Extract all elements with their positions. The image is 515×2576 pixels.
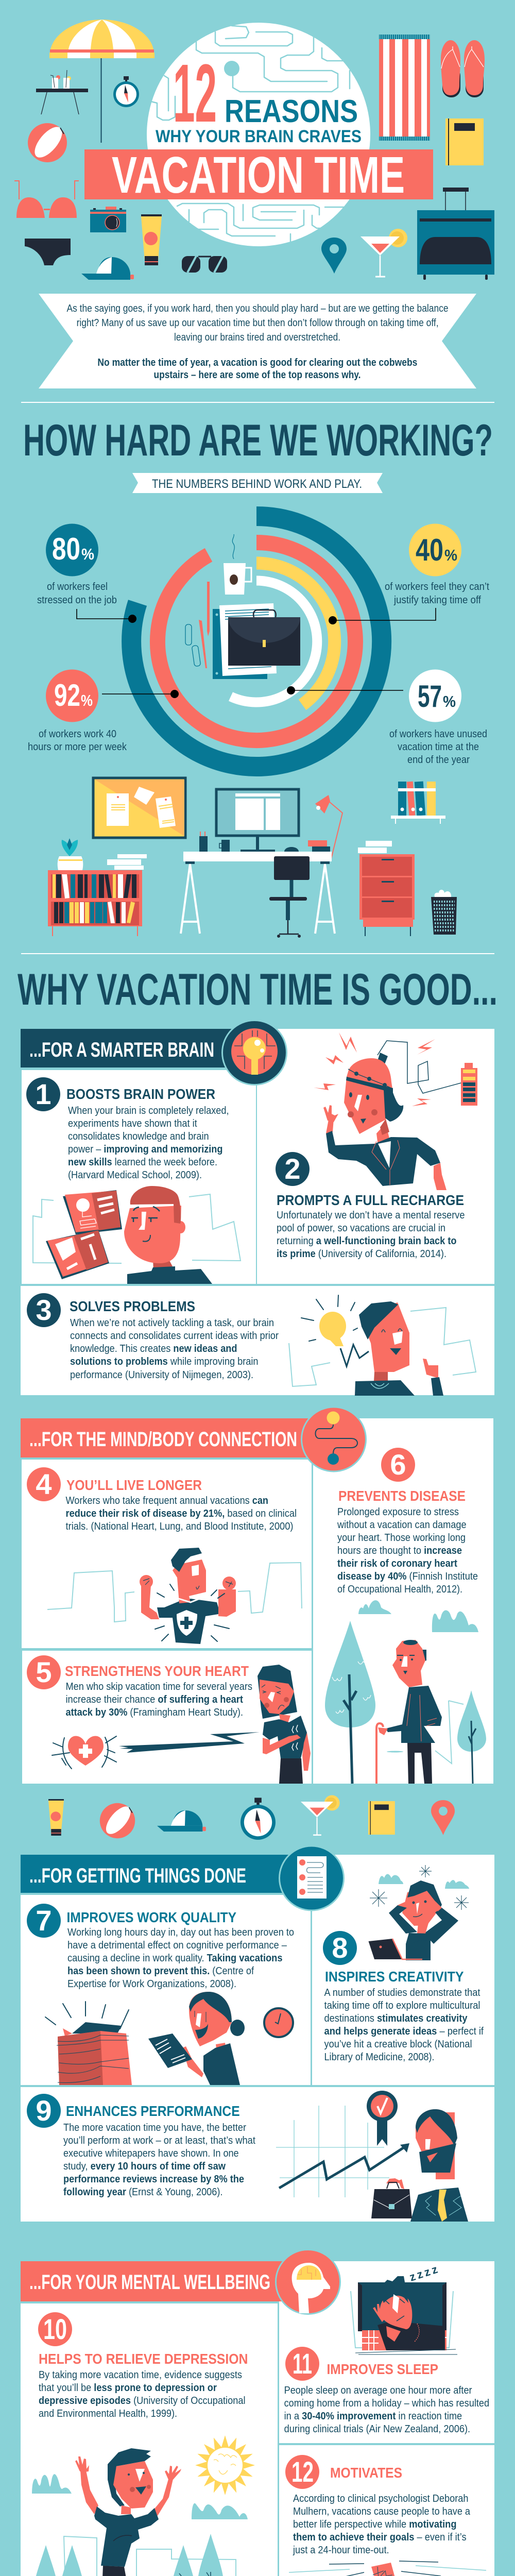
number badge 4: 4 — [36, 1468, 52, 1500]
stat: 57 percent: vacation time at the — [398, 741, 479, 753]
body text reason 12 — [293, 2493, 471, 2556]
number badge 6: 6 — [390, 1448, 406, 1481]
reason 8 — [323, 1865, 484, 2063]
number badge 3 — [27, 1293, 61, 1327]
icon: sunscreen tube — [48, 1799, 64, 1836]
body text reason 12: them to achieve their goals – even if it’s — [293, 2532, 467, 2543]
stacked papers on bookcase — [107, 854, 147, 870]
ring: 57 percent unused vacation — [231, 581, 317, 702]
subheading ribbon: numbers behind work and play: THE NUMBERS BEHIND WORK AND PLAY. — [152, 477, 362, 491]
body text reason 9: following year (Ernst & Young, 2006). — [63, 2187, 222, 2198]
body text reason 6: their risk of coronary heart — [337, 1558, 457, 1569]
number badge 6 — [381, 1448, 415, 1482]
body text reason 9: study, every 10 hours of time off saw — [63, 2161, 226, 2172]
waste basket — [431, 890, 457, 935]
icon: heart with cross — [52, 1736, 116, 1769]
badge: mind to heart connection — [301, 1406, 367, 1472]
title line why your brain craves: WHY YOUR BRAIN CRAVES — [156, 127, 362, 146]
intro text: No matter the time of year, a vacation is good for clearing out the cobwebs — [97, 357, 417, 368]
body text reason 1: new skills learned the week before. — [68, 1157, 217, 1168]
badge: brain and light bulb — [221, 1020, 287, 1086]
stat: 40 percent: of workers feel they can’t — [385, 581, 489, 592]
icon: beach towel — [379, 35, 430, 141]
section header: mental wellbeing: ...FOR YOUR MENTAL WELLBEING — [29, 2271, 270, 2294]
body text reason 4: trials. (National Heart, Lung, and Blood Institute, 2000) — [66, 1521, 294, 1532]
number badge 5: 5 — [36, 1656, 52, 1688]
icon: notebook — [213, 603, 277, 679]
body text reason 2: Unfortunately we don’t have a mental reserve — [277, 1210, 465, 1221]
body text reason 8: destinations stimulates creativity — [324, 2013, 468, 2024]
body text reason 12: better life perspective while motivating — [293, 2519, 456, 2530]
illustration: woman with chest pain — [258, 1665, 311, 1784]
ring: 80 percent stressed — [131, 516, 382, 767]
icon: award ribbon — [367, 2091, 398, 2146]
icon: lightning bolt — [119, 1732, 260, 1753]
body text reason 5: attack by 30% (Framingham Heart Study). — [66, 1707, 243, 1718]
section header: smarter brain: ...FOR A SMARTER BRAIN — [29, 1039, 214, 1061]
body text reason 8 — [324, 1987, 484, 2063]
desk — [181, 832, 335, 934]
intro ribbon — [39, 294, 476, 388]
stat: 40 percent: justify taking time off — [393, 595, 481, 606]
illustration: office scene — [48, 778, 457, 938]
body text reason 9: executive whitepapers have shown. In one — [63, 2148, 239, 2159]
section header: smarter brain — [21, 1029, 237, 1067]
reason 5 — [27, 1655, 311, 1784]
body text reason 7: Working long hours day in, day out has been proven to — [67, 1927, 294, 1938]
heading: enhances performance: ENHANCES PERFORMANCE — [66, 2103, 240, 2119]
illustration: woman with battery — [314, 1032, 477, 1190]
body text reason 7: causing a decline in work quality. Taking vacations — [67, 1953, 282, 1964]
body text reason 4: reduce their risk of disease by 21%, based on clinical — [66, 1508, 297, 1519]
icon: map pin — [321, 238, 347, 274]
ring: 40 percent can't justify — [256, 563, 335, 705]
heading: boosts brain power: BOOSTS BRAIN POWER — [66, 1086, 215, 1102]
number badge 8: 8 — [332, 1931, 348, 1964]
illustration: happy person with sun and trees — [31, 2435, 255, 2576]
icon: camera — [90, 207, 126, 232]
body text reason 8: taking time off to explore multicultural — [324, 2000, 480, 2011]
body text reason 4: Workers who take frequent annual vacations can — [66, 1495, 268, 1506]
section header: mind body connection: ...FOR THE MIND/BODY CONNECTION — [29, 1428, 297, 1451]
body text reason 5: Men who skip vacation time for several years — [66, 1681, 252, 1692]
number badge 11 — [285, 2347, 319, 2381]
icon: brain circle with maze — [147, 23, 370, 246]
bookcase — [48, 870, 142, 936]
subheading ribbon: numbers behind work and play — [132, 473, 383, 493]
reason 4 — [27, 1467, 302, 1644]
panel: for your mental wellbeing — [21, 2249, 494, 2576]
intro text — [67, 303, 448, 381]
illustration: strong healthy man — [47, 1548, 302, 1644]
panel: for the mind body connection — [21, 1406, 493, 1784]
chart: concentric percentage rings — [131, 516, 382, 767]
number badge 1: 1 — [35, 1078, 52, 1110]
body text reason 9: you’ll perform at work – or at least, that’s what — [63, 2135, 255, 2146]
body text reason 8: you’ve hit a creative block (National — [324, 2039, 472, 2050]
corkboard — [93, 778, 185, 838]
number badge 2: 2 — [284, 1153, 301, 1185]
reason 12 — [285, 2455, 486, 2576]
badge: head with brain — [275, 2249, 341, 2315]
intro text: upstairs – here are some of the top reasons why. — [153, 369, 360, 381]
body text reason 1: power – improving and memorizing — [68, 1144, 222, 1155]
number badge 1 — [26, 1077, 60, 1111]
intro text: As the saying goes, if you work hard, then you should play hard – but are we getting the balance — [67, 303, 448, 314]
body text reason 12: Mulhern, vacations cause people to have a — [293, 2506, 471, 2517]
body text reason 12: just a 24-hour time-out. — [293, 2545, 389, 2556]
body text reason 2 — [277, 1210, 465, 1260]
heading: inspires creativity: INSPIRES CREATIVITY — [325, 1969, 464, 1985]
body text reason 3: performance (University of Nijmegen, 2003). — [70, 1369, 253, 1381]
chart: rising arrow on grid — [276, 2106, 409, 2197]
body text reason 9: The more vacation time you have, the better — [63, 2122, 246, 2133]
illustration: desk items at chart centre — [185, 534, 300, 679]
header: title and vacation items — [14, 20, 494, 280]
body text reason 3: knowledge. This creates new ideas and — [70, 1343, 237, 1354]
icon: passport book — [368, 1801, 395, 1835]
icon: martini — [360, 229, 407, 277]
heading: prompts a full recharge: PROMPTS A FULL RECHARGE — [277, 1192, 464, 1208]
body text reason 3 — [70, 1317, 279, 1381]
body text reason 1: experiments have shown that it — [68, 1118, 197, 1129]
stat: 57 percent: % — [443, 692, 456, 710]
body text reason 4 — [66, 1495, 297, 1532]
icon: map pin — [431, 1800, 455, 1835]
number badge 8 — [323, 1931, 357, 1965]
body text reason 10: and Environmental Health, 1999). — [39, 2408, 177, 2419]
icon: bikini top — [14, 181, 79, 218]
badge: checklist — [279, 1845, 345, 1911]
illustration: woman thinking at laptop — [369, 1865, 469, 1960]
title word reasons: REASONS — [225, 94, 358, 129]
body text reason 6: without a vacation can damage — [337, 1519, 467, 1531]
illustration: paper stack and woman with clock — [45, 1992, 293, 2085]
body text reason 3: solutions to problems while improving brain — [70, 1356, 259, 1367]
illustration: businessperson with briefcase — [371, 2109, 468, 2222]
stat: 40 percent — [329, 523, 489, 624]
body text reason 8: A number of studies demonstrate that — [324, 1987, 480, 1998]
panel: for getting things done — [21, 1845, 494, 2222]
body text reason 9: performance reviews increase by 8% the — [63, 2174, 244, 2185]
body text reason 3: connects and consolidates current ideas with prior — [70, 1330, 279, 1342]
icon: cap — [81, 257, 134, 280]
icon: pencils and paperclips — [185, 582, 210, 668]
reason 9 — [21, 2087, 494, 2222]
number badge 7: 7 — [36, 1904, 52, 1937]
stat: 57 percent: end of the year — [407, 754, 470, 766]
body text reason 12: According to clinical psychologist Deborah — [293, 2493, 469, 2504]
icon: passport book — [445, 118, 484, 165]
number badge 7 — [27, 1904, 61, 1938]
stat: 80 percent: % — [81, 545, 94, 563]
body text reason 6: your heart. Those working long — [337, 1532, 466, 1544]
icon row: vacation items — [48, 1795, 455, 1840]
icon: cap — [157, 1810, 206, 1832]
stat: 80 percent: stressed on the job — [37, 595, 117, 606]
icon: beach ball — [28, 122, 67, 162]
icon: martini — [301, 1795, 340, 1835]
body text reason 7: has been shown to prevent this. (Centre of — [67, 1965, 254, 1977]
heading: improves sleep: IMPROVES SLEEP — [327, 2361, 438, 2377]
heading: strengthens your heart: STRENGTHENS YOUR HEART — [65, 1663, 249, 1679]
filing cabinet — [358, 841, 415, 936]
body text reason 1: consolidates knowledge and brain — [68, 1131, 209, 1142]
number badge 5 — [27, 1655, 61, 1689]
icon: beach umbrella — [49, 20, 154, 143]
stat: 57 percent: 57 — [418, 679, 442, 714]
body text reason 7: have a detrimental effect on cognitive performance – — [67, 1940, 287, 1951]
body text reason 6: hours are thought to increase — [337, 1545, 462, 1556]
icon: bikini bottom — [25, 239, 71, 265]
header: title and vacation items: 12 — [173, 47, 217, 139]
number badge 11: 11 — [293, 2347, 312, 2380]
stat: 92 percent: 92 — [54, 678, 80, 713]
stat: 80 percent: of workers feel — [47, 581, 108, 592]
section header: getting things done: ...FOR GETTING THINGS DONE — [29, 1865, 246, 1887]
icon: sunscreen tube — [141, 214, 162, 265]
stat: 92 percent: hours or more per week — [28, 741, 127, 753]
body text reason 11: in a 30-40% improvement in reaction time — [284, 2411, 462, 2422]
body text reason 5 — [66, 1681, 252, 1718]
stat: 40 percent: % — [444, 546, 457, 564]
icon: side table with drinks — [36, 70, 88, 114]
heading: helps to relieve depression: HELPS TO RELIEVE DEPRESSION — [39, 2351, 248, 2367]
heading: motivates: MOTIVATES — [330, 2465, 402, 2481]
potted plant — [58, 838, 83, 870]
illustration: sleeping man in window — [351, 2262, 457, 2354]
body text reason 6 — [337, 1506, 478, 1595]
reason 10 — [31, 2312, 255, 2576]
body text reason 1 — [68, 1105, 229, 1181]
body text reason 2: pool of power, so vacations are crucial in — [277, 1223, 445, 1234]
body text reason 11 — [284, 2385, 489, 2435]
body text reason 8: Library of Medicine, 2008). — [324, 2052, 435, 2063]
stat: 92 percent: of workers work 40 — [39, 728, 116, 740]
body text reason 7 — [67, 1927, 294, 1990]
number badge 2 — [276, 1152, 310, 1186]
reason 3 — [21, 1286, 494, 1396]
body text reason 10 — [39, 2369, 245, 2419]
body text reason 10: that you’ll be less prone to depression or — [39, 2382, 217, 2394]
monitor — [216, 789, 299, 852]
stat: 92 percent — [28, 670, 179, 753]
reason 1 — [26, 1077, 241, 1284]
body text reason 5: increase their chance of suffering a heart — [66, 1694, 243, 1705]
body text reason 7: Expertise for Work Organizations, 2008). — [67, 1978, 236, 1990]
icon: sunglasses — [182, 256, 227, 273]
stat: 40 percent: 40 — [416, 533, 443, 567]
stat: 80 percent — [37, 523, 136, 623]
number badge 9: 9 — [36, 2094, 52, 2127]
reason 6 — [325, 1448, 486, 1784]
body text reason 6: Prolonged exposure to stress — [337, 1506, 459, 1518]
body text reason 9 — [63, 2122, 255, 2198]
body text reason 2: its prime (University of California, 2014). — [277, 1248, 447, 1260]
number badge 12: 12 — [291, 2455, 314, 2488]
icon: coffee cup — [224, 534, 251, 595]
body text reason 8: and helps generate ideas – perfect if — [324, 2026, 484, 2037]
body text reason 11: coming home from a holiday – which has resulted — [284, 2398, 489, 2409]
office chair — [269, 856, 310, 938]
stat: 92 percent: % — [81, 691, 93, 709]
body text reason 2: returning a well-functioning brain back to — [277, 1235, 456, 1247]
body text reason 6: of Occupational Health, 2012). — [337, 1584, 462, 1595]
body text reason 10: depressive episodes (University of Occupational — [39, 2395, 245, 2406]
stat: 57 percent — [287, 670, 487, 766]
reason 11 — [284, 2262, 489, 2435]
number badge 3: 3 — [36, 1294, 52, 1326]
stat: 57 percent: of workers have unused — [389, 728, 487, 740]
icon: stopwatch — [113, 76, 139, 107]
title banner vacation time: VACATION TIME — [112, 146, 405, 204]
heading: you'll live longer: YOU’LL LIVE LONGER — [66, 1477, 202, 1493]
icon: suitcase — [417, 188, 494, 280]
illustration: raised fist with rays — [289, 2561, 486, 2576]
illustration: sleeping man in window: zzzz — [408, 2262, 441, 2284]
illustration: man reading books — [33, 1186, 241, 1284]
number badge 12 — [285, 2455, 319, 2489]
body text reason 6: disease by 40% (Finnish Institute — [337, 1571, 478, 1582]
heading: improves work quality: IMPROVES WORK QUALITY — [67, 1909, 236, 1925]
illustration: old man with cane in park — [325, 1600, 486, 1784]
reason 2 — [276, 1032, 477, 1260]
ring: 92 percent work 40 hours — [158, 543, 355, 740]
icon: flip flops — [441, 40, 485, 97]
heading: prevents disease: PREVENTS DISEASE — [338, 1488, 466, 1504]
icon: briefcase — [228, 610, 300, 666]
section header: getting things done — [21, 1855, 291, 1893]
number badge 4 — [27, 1467, 61, 1501]
icon: beach ball — [100, 1802, 135, 1838]
desk lamp — [315, 795, 342, 858]
binders on shelf — [391, 781, 445, 824]
section header: mind body connection — [21, 1418, 314, 1458]
body text reason 3: When we’re not actively tackling a task, our brain — [70, 1317, 274, 1329]
body text reason 11: People sleep on average one hour more after — [284, 2385, 472, 2396]
panel: for a smarter brain — [21, 1020, 494, 1396]
reason 7 — [27, 1904, 294, 2085]
heading: solves problems: SOLVES PROBLEMS — [70, 1298, 195, 1314]
number badge 10: 10 — [43, 2313, 67, 2345]
body text reason 11: during clinical trials (Air New Zealand, 2006). — [284, 2424, 470, 2435]
section header: mental wellbeing — [21, 2261, 283, 2301]
intro text: leaving our brains tired and overstretched. — [174, 332, 340, 343]
stat: 80 percent: 80 — [52, 532, 80, 566]
body text reason 1: When your brain is completely relaxed, — [68, 1105, 229, 1116]
body text reason 1: (Harvard Medical School, 2009). — [68, 1170, 202, 1181]
number badge 9 — [27, 2094, 61, 2128]
body text reason 10: By taking more vacation time, evidence suggests — [39, 2369, 242, 2381]
illustration: man with light bulb idea — [289, 1295, 476, 1396]
intro text: right? Many of us save up our vacation time but then don’t follow through on taking time off, — [77, 317, 439, 329]
icon: stopwatch — [241, 1798, 276, 1840]
